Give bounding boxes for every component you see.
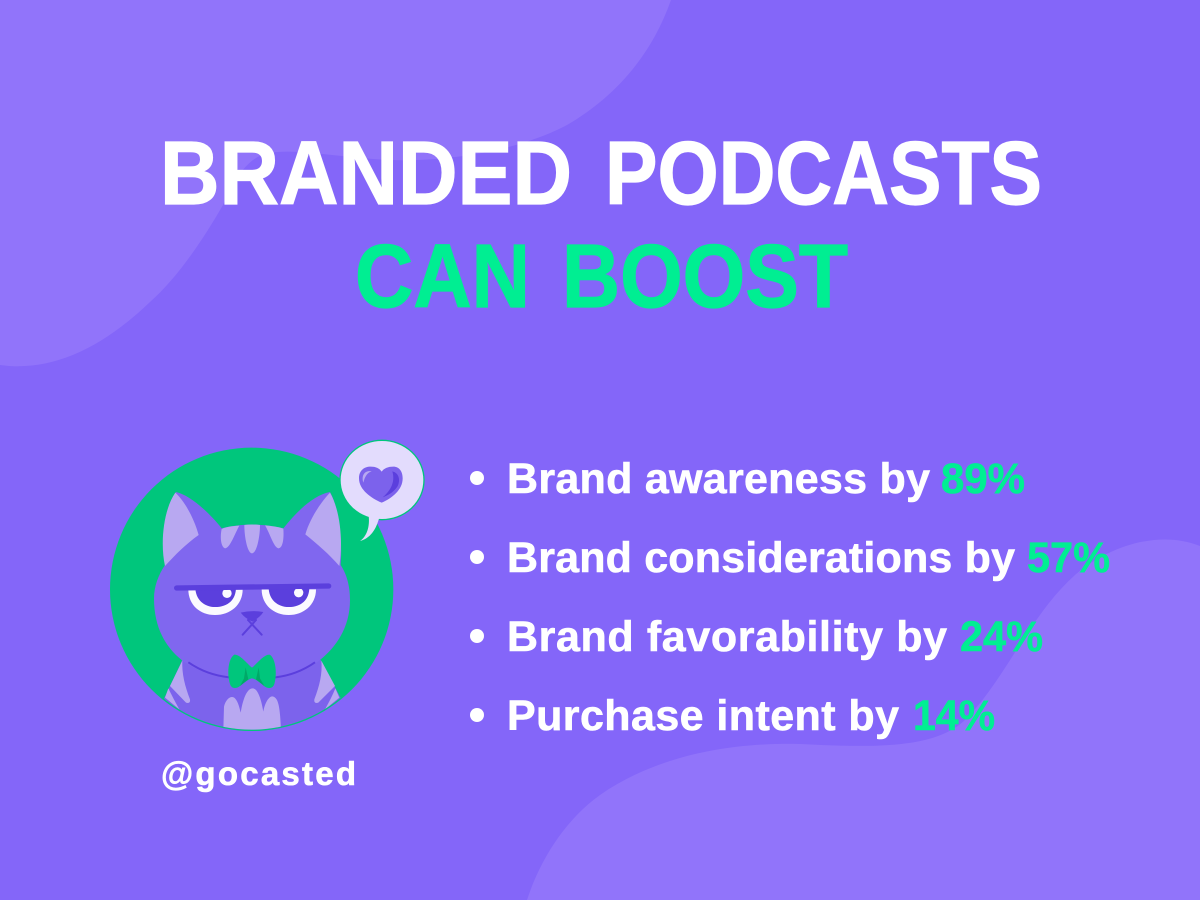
cat eyes <box>188 587 316 615</box>
head stripes <box>221 524 284 553</box>
blob: bottom right <box>527 539 1200 900</box>
collar <box>188 662 315 677</box>
cat ears <box>163 493 341 566</box>
speech bubble with heart <box>340 440 424 541</box>
cat avatar <box>110 440 424 733</box>
blob: top left <box>0 0 671 366</box>
title <box>160 124 1042 327</box>
item: brand favorability: Brand favorability by <box>507 613 947 661</box>
green circle <box>110 448 393 731</box>
bullet list <box>470 455 1110 740</box>
cat body <box>163 659 342 733</box>
title: BRANDED <box>160 124 572 224</box>
cat head <box>154 492 350 678</box>
item: brand considerations: 57% <box>1027 534 1110 582</box>
title: PODCASTS <box>605 124 1042 224</box>
item: brand awareness: 89% <box>941 455 1025 503</box>
item: brand awareness: Brand awareness by <box>507 455 930 503</box>
item: brand favorability: 24% <box>960 613 1043 661</box>
heart <box>359 467 403 503</box>
title: BOOST <box>562 227 848 327</box>
item: purchase intent: 14% <box>913 692 995 740</box>
bow tie <box>228 655 276 688</box>
cat brow <box>177 586 329 588</box>
item: purchase intent: Purchase intent by <box>507 692 899 740</box>
title: CAN <box>355 227 530 327</box>
cat nose and mouth <box>241 611 263 635</box>
item: brand considerations: Brand considerations by <box>507 534 1015 582</box>
handle: @gocasted <box>161 755 356 792</box>
